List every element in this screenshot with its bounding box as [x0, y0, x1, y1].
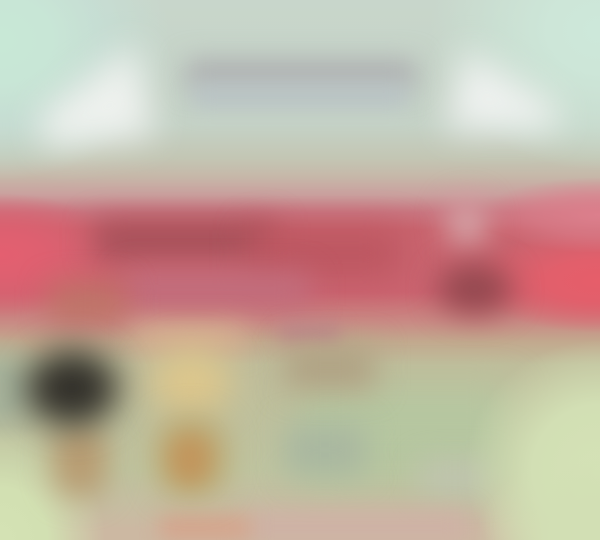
text block: banner subtext	[125, 274, 310, 306]
title box	[186, 60, 416, 88]
background: bottom-right light green	[460, 340, 600, 540]
icon: pale highlight above banner figure	[445, 198, 489, 248]
background: left edge grey-green	[0, 330, 70, 450]
background: bottom-left light green	[0, 420, 110, 540]
text block: banner middle tint	[250, 230, 400, 276]
figure: left dark hair	[26, 350, 118, 426]
panel: banner fade to peach	[135, 325, 245, 349]
panel: right red edge	[460, 225, 600, 335]
panel: right upper pink edge	[480, 175, 600, 255]
panel: grey patch lower right	[420, 460, 490, 495]
figure: right orange body	[172, 436, 208, 482]
panel: footer orange-pink left end	[160, 516, 250, 540]
background: bottom-right corner light green	[470, 450, 600, 540]
panel: pink footer band	[245, 512, 470, 540]
icon: right white wing	[438, 49, 564, 146]
panel: central green area	[300, 385, 510, 480]
figure: right yellow head	[150, 348, 232, 416]
title box lower part	[192, 86, 408, 106]
panel: lower left orange tint in banner	[50, 285, 125, 321]
background: top-right mint corner	[430, 0, 600, 180]
icon: dark figure in banner	[438, 264, 512, 314]
panel: central grey-green patch	[285, 425, 365, 475]
icon: left white wing	[32, 45, 162, 162]
panel: left red edge	[0, 190, 130, 320]
heading: dark red banner title	[95, 222, 275, 258]
panel: mauve patch at banner base	[280, 325, 340, 341]
background: top-left mint corner	[0, 0, 170, 180]
figure: right orange body halo	[155, 418, 227, 496]
figure: left body	[52, 425, 108, 497]
panel: tan patch at top of central area	[285, 345, 375, 390]
